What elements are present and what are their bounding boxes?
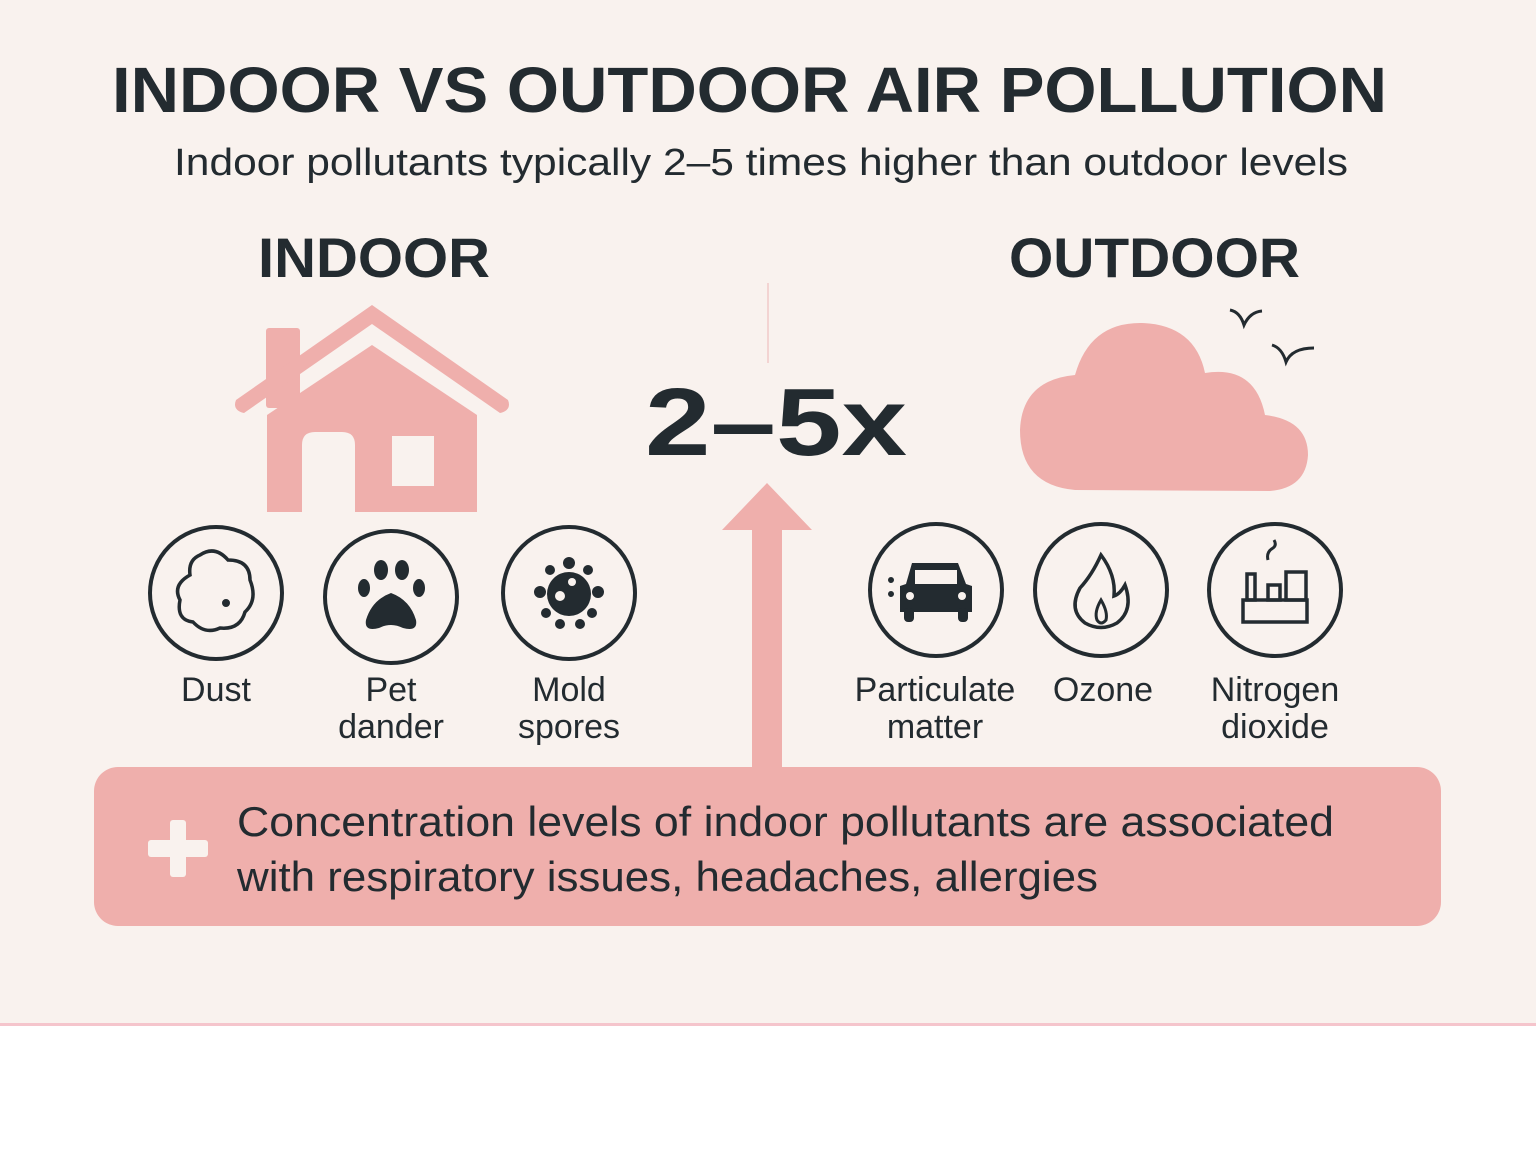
icon: flame [1035,524,1167,656]
icon: house [235,305,509,512]
icon: paw [325,531,457,663]
title: INDOOR VS OUTDOOR AIR POLLUTION [112,54,1387,126]
labels: Dust [181,671,252,709]
labels: Nitrogen [1211,671,1339,709]
labels: Ozone [1053,671,1153,709]
callout banner [94,767,1441,926]
icon: factory [1209,524,1341,656]
subtitle: Indoor pollutants typically 2–5 times higher than outdoor levels [174,142,1348,184]
divider line [767,283,769,363]
heading: outdoor: OUTDOOR [1009,226,1300,289]
icon: cloud with birds [1020,310,1314,491]
pollutant icons outdoor [870,524,1341,656]
callout banner: Concentration levels of indoor pollutants are associated [237,798,1334,845]
icon: car [870,524,1002,656]
labels: Pet [365,671,417,709]
callout banner: with respiratory issues, headaches, allergies [236,853,1098,900]
heading: indoor: INDOOR [258,226,490,289]
arrow [722,483,812,770]
labels: spores [518,708,620,746]
big number: 2–5x [645,369,907,476]
labels: Mold [532,671,606,709]
labels: dioxide [1221,708,1329,746]
pollutant icons indoor [150,527,635,663]
icon: dust [150,527,282,659]
labels: Particulate [855,671,1015,709]
labels [181,671,1339,746]
labels: matter [887,708,983,746]
labels: dander [338,708,444,746]
icon: plus [148,820,208,877]
icon: mold [503,527,635,659]
